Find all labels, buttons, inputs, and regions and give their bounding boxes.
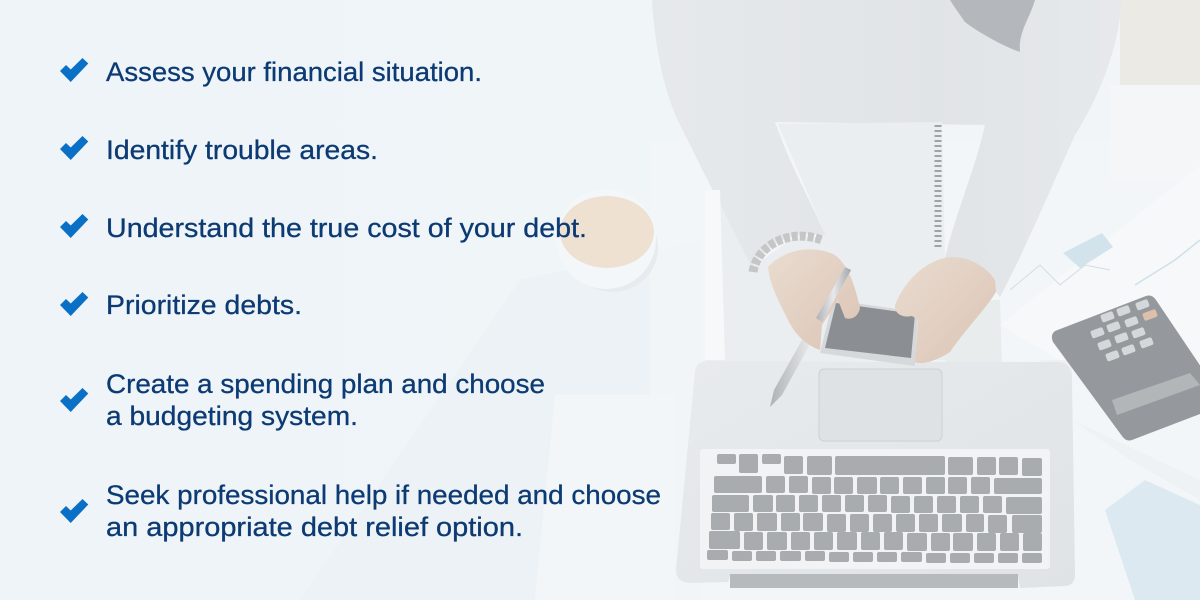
- phone: [820, 300, 918, 366]
- item: spending plan: [60, 369, 545, 431]
- hair: [950, 0, 1035, 52]
- item: professional help: Seek professional help if needed and choose: [106, 480, 661, 510]
- item: professional help: an appropriate debt relief option.: [106, 512, 523, 542]
- checklist: [60, 57, 661, 542]
- item: spending plan: a budgeting system.: [106, 401, 358, 431]
- icon: check: [60, 136, 88, 160]
- item: professional help: [60, 480, 661, 542]
- papers with chart: [1000, 165, 1200, 600]
- sweater: [652, 0, 1122, 297]
- item: prioritize: Prioritize debts.: [106, 290, 302, 320]
- icon: check: [60, 388, 88, 412]
- notebook: [705, 122, 1002, 362]
- pen clip over hand: [816, 267, 851, 322]
- item: spending plan: Create a spending plan and choose: [106, 369, 545, 399]
- icon: check: [60, 58, 88, 82]
- bracelet: [753, 236, 822, 272]
- laptop: [676, 361, 1075, 588]
- item: assess: Assess your financial situation.: [106, 57, 482, 87]
- pen: [770, 267, 851, 407]
- item: true cost: Understand the true cost of your debt.: [106, 213, 587, 243]
- right hand: [895, 257, 996, 363]
- icon: check: [60, 292, 88, 316]
- keyboard: [707, 454, 1042, 563]
- item: trouble areas: Identify trouble areas.: [106, 135, 378, 165]
- icon: check: [60, 214, 88, 238]
- calculator: [1052, 296, 1200, 440]
- coffee cup: [556, 189, 658, 292]
- icon: check: [60, 499, 88, 523]
- left hand: [768, 249, 860, 350]
